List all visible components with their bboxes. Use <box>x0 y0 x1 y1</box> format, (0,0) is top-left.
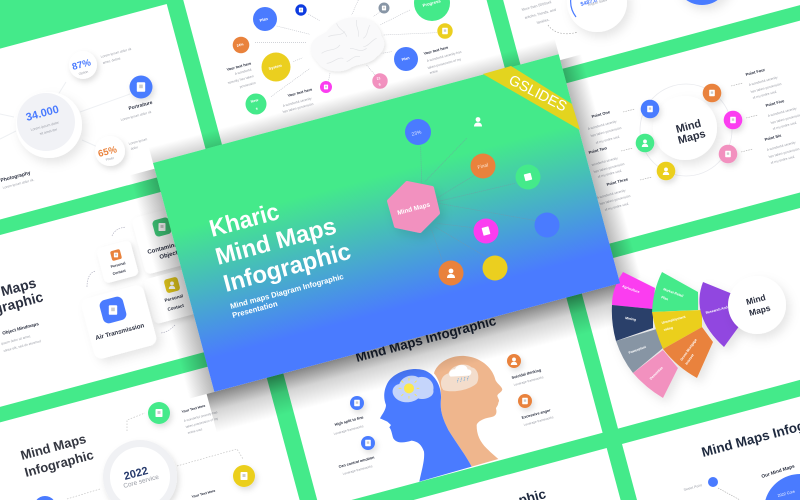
item: control emotion: Leverage frameworks <box>342 464 373 476</box>
ribbon: GSLIDES <box>483 66 580 130</box>
node: new: New <box>250 98 259 104</box>
labels: left points: Point One <box>591 109 611 119</box>
node: final: Final <box>477 162 489 171</box>
labels: right points: A wonderful serenity <box>748 75 778 87</box>
stat circle: 34.000: 34.000 <box>25 104 60 124</box>
text block: top: entire soul. <box>187 427 203 435</box>
node: green <box>148 402 170 424</box>
subtitle and body <box>1 321 41 353</box>
item: high split: Leverage frameworks <box>333 424 364 436</box>
node: pink 21 9 <box>372 73 388 89</box>
panel: sales slide top right <box>521 0 729 34</box>
item: control emotion: Can control emotion <box>338 455 376 469</box>
stat circle: 87%: 87% <box>71 57 93 73</box>
text block: sales note: More than 5000sell <box>521 0 552 12</box>
text block: left <box>226 62 256 89</box>
centre circle: Maps <box>748 303 772 318</box>
subtitle and body: Object Mindmaps <box>2 321 40 336</box>
node: blue <box>534 212 560 238</box>
centre circle: Maps <box>677 128 707 147</box>
node: pink <box>719 145 737 163</box>
stat ring: august sales <box>567 0 627 32</box>
node: pink 21 9: 9 <box>378 83 381 87</box>
centre circle: Mind <box>675 118 703 136</box>
subtitle: Presentation <box>231 299 279 320</box>
core circle: 2022 <box>123 465 149 483</box>
panel: stats slide top left <box>0 47 154 190</box>
node: magenta <box>474 218 498 244</box>
text block: left: possession <box>239 81 256 89</box>
slide title <box>19 431 95 480</box>
node: 24% <box>233 37 249 53</box>
hexagon: mind maps <box>389 183 438 231</box>
labels: right points: of my entire soul, <box>772 121 798 131</box>
stat circle: 65% <box>95 136 125 166</box>
stat circle: 87% <box>69 51 97 79</box>
labels: left points: of my entire soul, <box>604 202 630 212</box>
stat circle: 34.000 <box>16 92 82 158</box>
arrows <box>621 83 758 180</box>
labels: right points: A wonderful serenity <box>766 140 796 152</box>
label: portraiture: Portraiture <box>128 100 154 112</box>
hexagon: mind maps: Mind Maps <box>397 201 431 217</box>
item: suicidal thinking <box>507 354 544 387</box>
fan labels <box>622 284 728 381</box>
panel: main cover slide <box>153 54 620 392</box>
node: magenta icon <box>320 81 332 93</box>
text block: right: entire <box>429 69 438 75</box>
icon: person search <box>474 117 482 126</box>
text block: middle: A wonderful serenity <box>282 96 312 108</box>
text block: middle: Your text here <box>287 88 313 98</box>
text block: left: Your text here <box>226 62 252 72</box>
label: portraiture: Lorem ipsum dolor sit <box>120 110 152 122</box>
item: control emotion <box>338 436 376 476</box>
labels: left points: of my entire soul, <box>597 169 623 179</box>
labels: right points <box>745 67 800 165</box>
panel: head comparison slide <box>333 313 554 482</box>
text block: right: taken possession of my <box>427 57 462 70</box>
node: yellow <box>657 162 675 180</box>
arrow: dashed arc <box>548 25 578 34</box>
node: orange <box>703 84 721 102</box>
node: big blue: 2022 Core <box>777 490 795 498</box>
labels: left points: Point Two <box>588 145 608 155</box>
card: air transmission: Air Transmission <box>95 322 145 342</box>
node: magenta <box>724 111 742 129</box>
node: sweet point <box>683 477 718 492</box>
node: progress <box>414 0 450 21</box>
centre circle: Mind <box>745 292 767 307</box>
labels: right points: has taken possession <box>768 147 800 159</box>
card: personal contact small <box>96 240 139 284</box>
fan labels: Research And <box>705 305 728 315</box>
node: blue <box>641 100 659 118</box>
node: yellow <box>482 256 508 280</box>
fan labels: Agriculture <box>622 284 640 294</box>
centre circle <box>653 96 717 160</box>
title: Infographic <box>221 238 354 298</box>
label: portraiture <box>120 100 154 122</box>
fan labels: Dementias <box>649 366 664 381</box>
stat circle: 65%: Photo <box>105 156 115 162</box>
stat note: 65% <box>128 137 148 151</box>
ribbon: GSLIDES: GSLIDES <box>506 72 569 115</box>
node: plan right <box>394 47 418 71</box>
text block: top: A wonderful serenity has <box>183 410 218 423</box>
labels: left points: has taken possession <box>599 194 631 206</box>
labels: right points: A wonderful serenity <box>767 106 797 118</box>
node: blue circle <box>675 0 729 5</box>
text block: middle: has taken possession <box>282 102 314 114</box>
card: personal contact right: Contact <box>167 303 185 312</box>
node: green chart <box>516 164 540 190</box>
text block: left: serenity has taken <box>227 74 254 85</box>
text block: bottom: Your Text Here <box>191 489 216 499</box>
label: our mind maps: Our Mind Maps <box>761 463 796 480</box>
text block: right: A wonderful serenity has <box>426 50 462 63</box>
node: new <box>246 94 266 114</box>
text block: top: taken possession of my <box>185 416 219 429</box>
panel: fan wheel slide <box>612 272 786 398</box>
stat circle: 65%: 65% <box>97 144 119 160</box>
connector lines <box>421 138 542 263</box>
item: suicidal thinking: Suicidal thinking <box>511 368 542 380</box>
stat circle: 87%: Option <box>78 70 89 76</box>
labels: left points: Point Three <box>606 176 629 187</box>
node: pink 21 9: 21 <box>376 76 381 81</box>
text block: top <box>181 404 219 435</box>
slide title: Infographic <box>23 447 95 480</box>
card: air transmission <box>80 284 158 360</box>
connector lines <box>255 0 437 97</box>
labels: left points: A wonderful serenity <box>596 188 626 200</box>
panel: brain slide top center <box>226 0 462 114</box>
subtitle: Mind maps Diagram Infographic <box>229 272 345 311</box>
card: contaminated object: Contaminated <box>147 240 187 256</box>
node: plan right: Plan <box>401 56 411 62</box>
labels: left points: wonderful serenity <box>591 156 618 167</box>
label: photography: Lorem ipsum dolor sit, <box>2 178 35 190</box>
stat note: 65%: Lorem ipsum <box>128 137 148 146</box>
title: Kharic <box>207 198 282 243</box>
arrows: dashed arcs <box>87 227 175 333</box>
fan labels: Plan <box>661 295 669 301</box>
node: green <box>636 134 654 152</box>
core circle <box>103 440 177 500</box>
labels: right points: of my entire soul, <box>770 155 796 165</box>
node: plan: Plan <box>259 16 269 23</box>
stat circle: 34.000: sit amet iter <box>39 127 59 136</box>
card: contaminated object: Object <box>159 250 179 261</box>
labels: right points: of my entire soul, <box>752 90 778 100</box>
panel: core service slide <box>19 402 255 500</box>
dashed connectors <box>67 413 243 499</box>
panel: mind maps ring slide <box>587 67 800 212</box>
text block: sales note: families. <box>536 18 550 25</box>
node: 23% <box>405 119 431 145</box>
cover background <box>153 54 620 392</box>
item: high split: High split to fine <box>334 415 364 427</box>
node: sweet point: Sweet Point <box>683 483 702 492</box>
node: navy icon <box>295 4 307 16</box>
node: system <box>262 52 290 82</box>
fan labels: Gross Mortgage <box>680 338 698 362</box>
labels: left points <box>587 109 631 212</box>
fan labels: Interest <box>685 353 695 366</box>
orbit ring <box>640 84 732 176</box>
text block: right <box>423 46 462 75</box>
item: excessive anger: Leverage frameworks <box>523 415 554 427</box>
slide title: Mind Maps <box>19 431 88 463</box>
illustration: brain <box>311 17 384 71</box>
node: orange <box>438 260 464 286</box>
labels: left points: has taken possession <box>593 162 625 174</box>
text block: sales note: articles, friends, and <box>524 8 556 20</box>
node: yellow <box>233 465 255 487</box>
fan labels: Mining <box>625 316 636 322</box>
node: blue <box>36 496 54 500</box>
node: 23%: 23% <box>411 129 423 138</box>
node: system: System <box>268 63 283 71</box>
node: big blue <box>765 474 800 500</box>
labels: right points: Point Six <box>764 133 783 142</box>
stat note: 87% <box>100 47 132 65</box>
node: yellow icon <box>437 23 453 39</box>
labels: left points: of my entire soul, <box>595 135 621 145</box>
labels: left points: has taken possession <box>590 126 622 138</box>
panel: air transmission slide <box>0 203 209 360</box>
fan labels: rating <box>663 326 673 332</box>
title <box>207 198 354 298</box>
node: plan <box>253 7 277 31</box>
node: new: s <box>255 107 258 111</box>
fan labels: Powerplant <box>628 345 647 355</box>
text block: right: Your text here <box>423 46 449 56</box>
text block: sales note <box>521 0 556 25</box>
text block: left: A wonderful <box>234 68 252 76</box>
card: personal contact small: Personal <box>110 261 126 269</box>
fan labels: Market Retail <box>663 287 684 298</box>
node: grey icon <box>378 2 390 14</box>
card: personal contact right <box>143 266 209 324</box>
stat note: 87%: amet, dolore <box>102 56 121 65</box>
fan labels: Unemployment <box>661 315 687 325</box>
stat note: 65%: dolor <box>130 145 139 151</box>
arrow: connector <box>718 488 740 500</box>
cover shadow <box>124 33 652 437</box>
subtitle and body: ipsum dolor sit amet, <box>1 334 31 346</box>
item: excessive anger <box>518 394 554 427</box>
item: suicidal thinking: Leverage frameworks <box>513 375 544 387</box>
card: personal contact right: Personal <box>164 293 184 303</box>
core circle: Core service <box>123 474 160 490</box>
illustration: two heads <box>380 356 502 482</box>
title: Mind Maps <box>213 213 339 271</box>
labels: right points: Point Five <box>765 98 785 108</box>
labels: left points: A wonderful serenity <box>587 119 617 131</box>
label: photography <box>0 170 35 190</box>
text block: middle <box>282 88 314 114</box>
text block: top: Your Text Here <box>181 404 206 414</box>
item: high split <box>333 396 364 436</box>
label: photography: Photography <box>0 170 32 184</box>
card: personal contact small: Contact <box>112 268 127 276</box>
node: 24%: 24% <box>236 42 245 48</box>
fan chart <box>612 272 740 398</box>
slide title: Mind Maps Infographic <box>354 313 498 365</box>
stat circle: 34.000: Lorem ipsum dolor <box>30 120 60 132</box>
card: contaminated object <box>131 203 204 275</box>
stat note: 87%: Lorem ipsum dolor sit <box>100 47 132 59</box>
labels: right points: has taken possession <box>750 82 782 94</box>
item: excessive anger: Excessive anger <box>521 408 552 420</box>
centre circle <box>728 276 786 334</box>
subtitle and body: ctetur elit, sed do eiusmod <box>3 339 41 353</box>
labels: right points: Point Four <box>745 67 766 77</box>
icon: portraiture <box>130 76 152 98</box>
node: final <box>470 154 496 178</box>
panel: bottom right slide <box>683 407 800 500</box>
